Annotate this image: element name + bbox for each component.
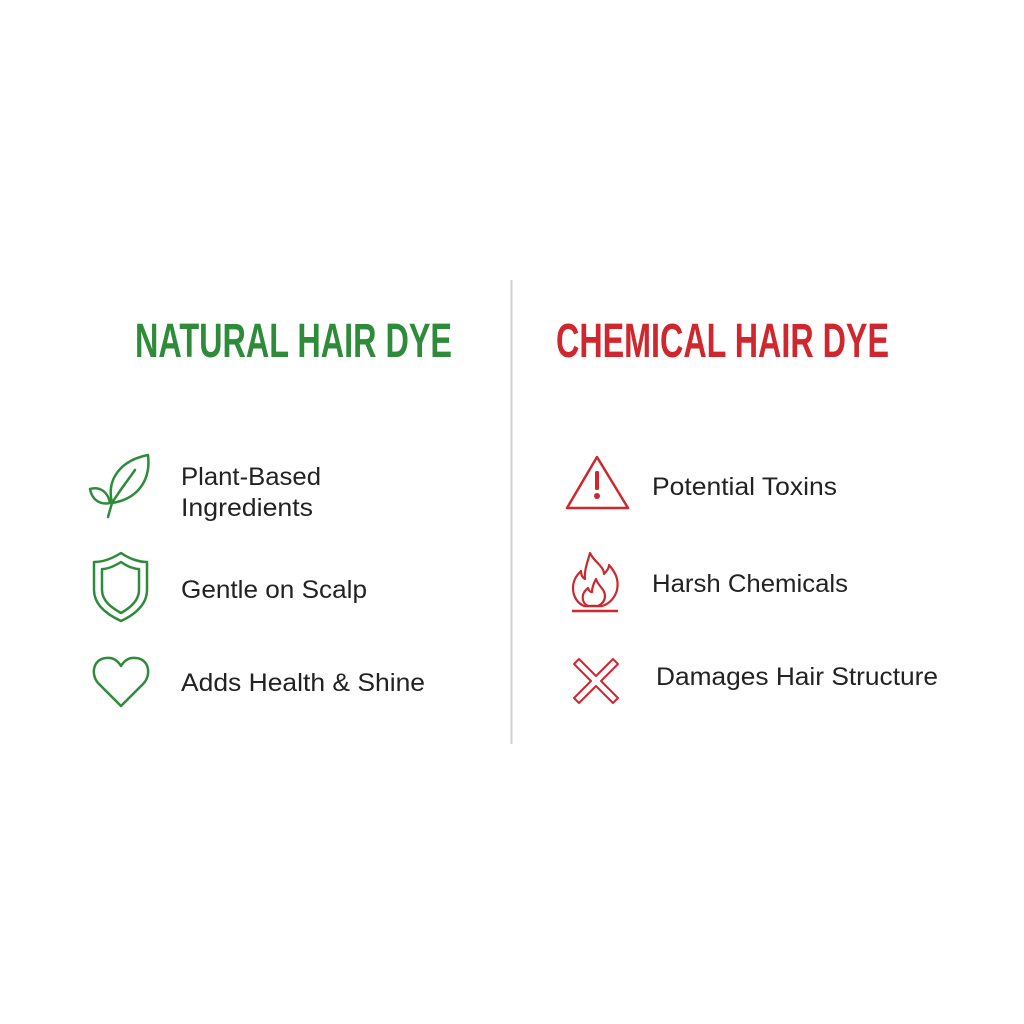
icon: heart: [94, 658, 148, 706]
text: plant-based ingredients: Plant-Based: [181, 463, 321, 491]
panel: natural hair dye: [90, 315, 452, 706]
title: natural hair dye: NATURAL HAIR DYE: [135, 315, 452, 368]
text: potential toxins: Potential Toxins: [652, 473, 837, 501]
panel: chemical hair dye: [556, 315, 938, 703]
icon: x mark: [574, 659, 618, 703]
text: harsh chemicals: Harsh Chemicals: [652, 570, 848, 598]
icon: fire: [572, 553, 618, 611]
icon: warning: [567, 457, 628, 508]
icon: shield: [94, 553, 147, 621]
text: damages hair structure: Damages Hair Structure: [656, 663, 938, 691]
icon: leaf: [90, 455, 148, 517]
text: adds health & shine: Adds Health & Shine: [181, 669, 425, 697]
text: gentle on scalp: Gentle on Scalp: [181, 576, 367, 604]
text: plant-based ingredients: Ingredients: [181, 494, 313, 522]
